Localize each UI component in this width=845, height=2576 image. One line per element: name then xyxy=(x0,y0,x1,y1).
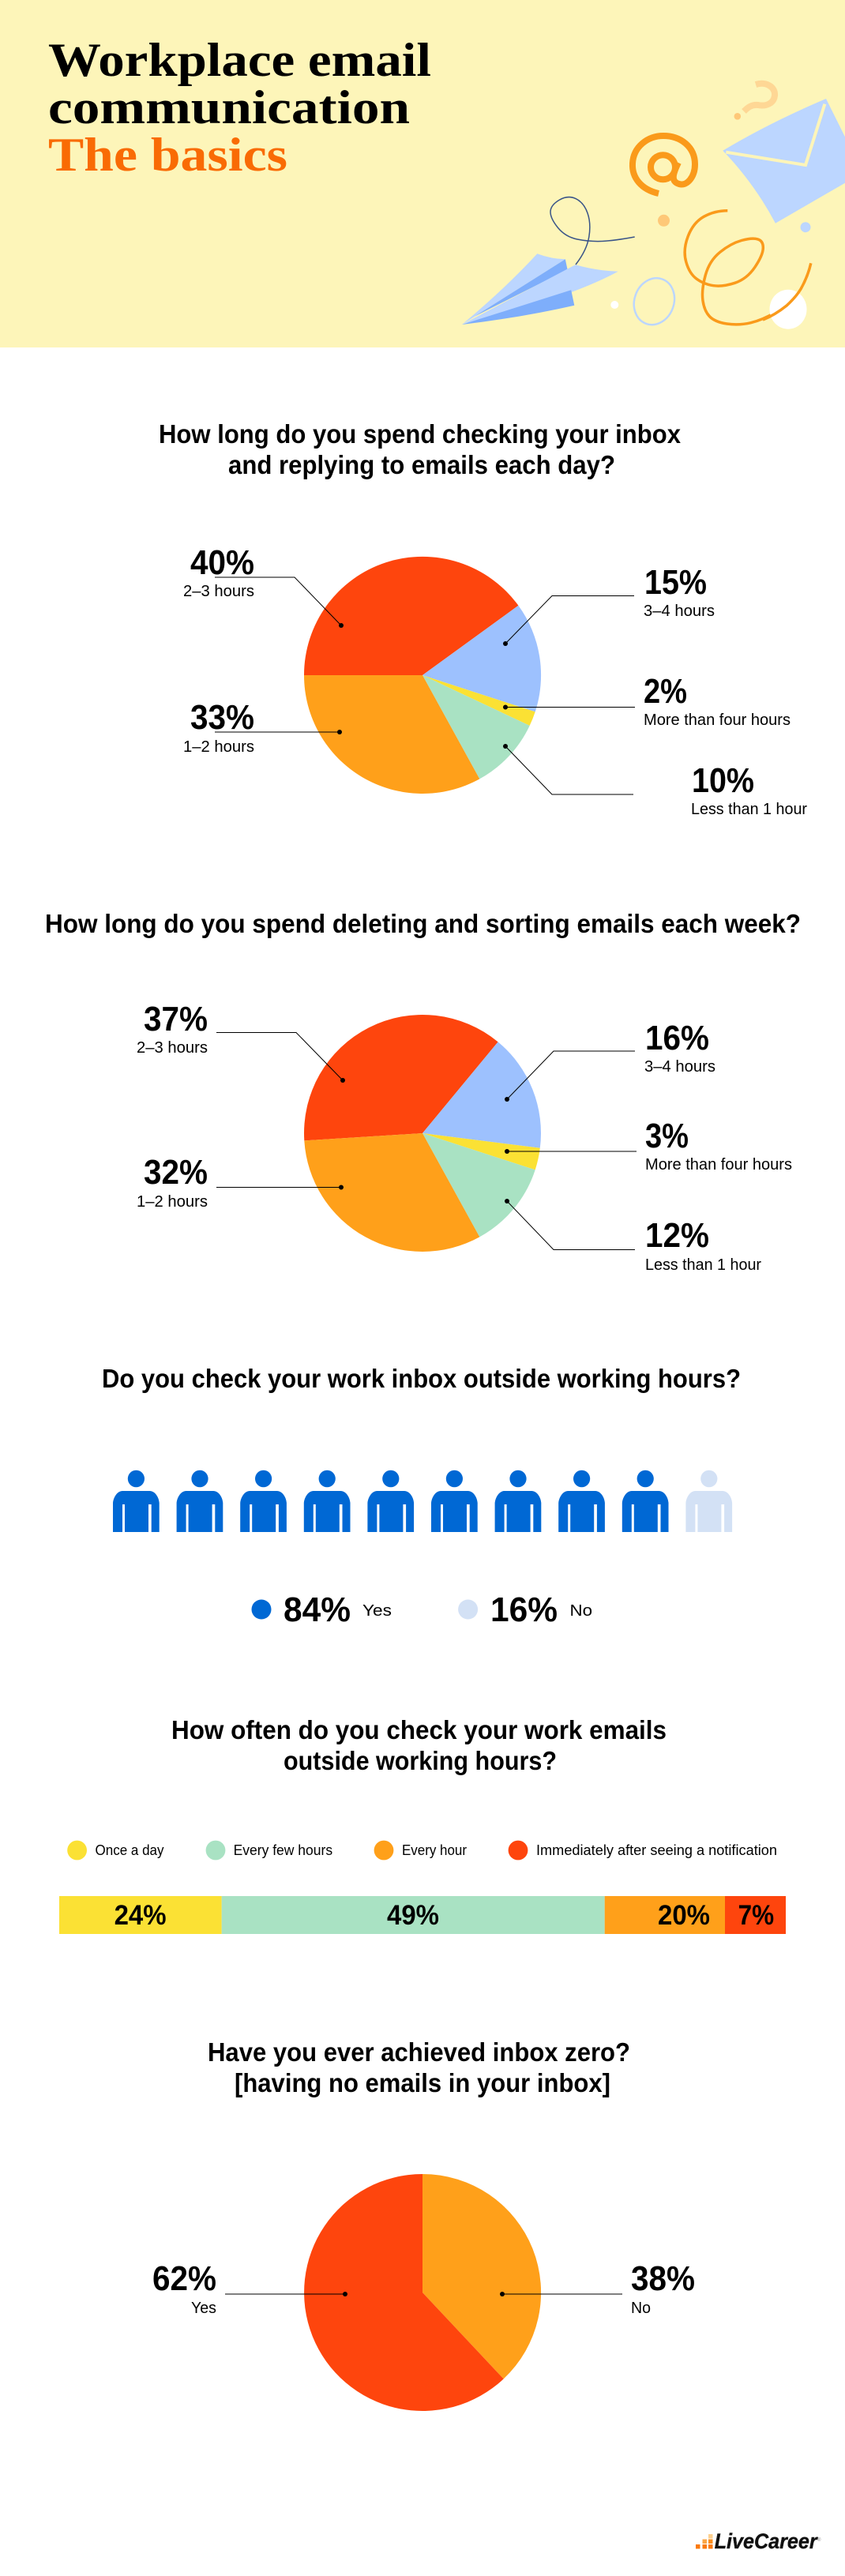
legend: no: 16% xyxy=(490,1590,558,1629)
legend: yes: 84% xyxy=(284,1590,351,1629)
legend item: immediately: Immediately after seeing a notification xyxy=(536,1842,777,1858)
bar segment: 24% xyxy=(59,1896,222,1934)
icon: person 6 xyxy=(431,1470,478,1532)
bar segment: 7% xyxy=(725,1896,786,1934)
heading: inbox time: and replying to emails each day? xyxy=(228,450,615,479)
callout: 38% xyxy=(500,2259,695,2317)
callout: 3%: 3% xyxy=(645,1117,689,1155)
callout: 15%: 3–4 hours xyxy=(644,602,715,620)
callout: 33%: 33% xyxy=(190,698,254,737)
stacked bar chart xyxy=(59,1896,786,1934)
callout: 15%: 15% xyxy=(644,563,707,602)
legend: yes: Yes xyxy=(362,1602,392,1620)
bar segment: 20% xyxy=(605,1896,725,1934)
callout: 10% xyxy=(503,744,807,818)
icon: blue ring xyxy=(628,272,681,330)
heading: inbox time: How long do you spend checking your inbox xyxy=(159,419,682,449)
pie chart: inbox zero xyxy=(304,2174,541,2411)
callout: 37%: 2–3 hours xyxy=(137,1038,208,1057)
title xyxy=(48,34,431,181)
bar segment: 24%: 24% xyxy=(115,1900,167,1931)
bar segment: 20%: 20% xyxy=(658,1900,710,1931)
icon: person 2 xyxy=(177,1470,223,1532)
callout: 62%: Yes xyxy=(191,2299,216,2317)
pie chart: time deleting and sorting xyxy=(304,1015,541,1252)
icon: person 4 xyxy=(304,1470,351,1532)
callout: 32%: 32% xyxy=(144,1153,208,1192)
callout: 33%: 1–2 hours xyxy=(183,738,254,756)
icon: white blob xyxy=(769,290,807,329)
heading: frequency: outside working hours? xyxy=(284,1746,557,1775)
icon: person 10 xyxy=(685,1470,732,1532)
legend: yes xyxy=(251,1590,392,1629)
heading: check inbox outside hours: Do you check your work inbox outside working hours? xyxy=(102,1364,741,1393)
icon: person 8 xyxy=(558,1470,605,1532)
title: communication xyxy=(48,81,410,133)
icon: question mark xyxy=(734,84,775,120)
callout: 12%: 12% xyxy=(645,1216,709,1255)
callout: 62%: 62% xyxy=(152,2259,216,2298)
icon: paper plane xyxy=(462,253,618,325)
icon: orange squiggle end xyxy=(763,263,811,320)
logo: LiveCareer: ® xyxy=(817,2537,821,2543)
icon: at sign xyxy=(633,136,695,193)
legend item: every few hours: Every few hours xyxy=(234,1842,332,1858)
legend: no xyxy=(458,1590,592,1629)
legend: frequency xyxy=(67,1841,777,1860)
chart: people pictogram xyxy=(113,1470,732,1532)
icon: logo squares xyxy=(696,2534,712,2549)
callout: 40%: 40% xyxy=(190,543,254,582)
pie chart: time checking inbox xyxy=(304,557,541,794)
icon: envelope xyxy=(723,99,845,223)
callout: 37%: 37% xyxy=(144,1000,208,1038)
legend item: every few hours xyxy=(206,1841,332,1860)
icon: plane trail xyxy=(550,197,635,265)
callout: 3%: More than four hours xyxy=(645,1155,792,1173)
callout: 32%: 1–2 hours xyxy=(137,1192,208,1211)
callout: 16%: 16% xyxy=(645,1019,709,1057)
callout: 10%: Less than 1 hour xyxy=(691,800,807,818)
callout: 40%: 2–3 hours xyxy=(183,582,254,600)
callout: 2%: 2% xyxy=(644,672,687,711)
title: The basics xyxy=(48,129,287,181)
icon: person 7 xyxy=(495,1470,541,1532)
legend: no: No xyxy=(570,1602,592,1620)
heading: inbox zero: [having no emails in your inbox] xyxy=(235,2068,610,2097)
callout: 38%: 38% xyxy=(631,2259,695,2298)
callout: 15% xyxy=(503,563,715,646)
callout: 16%: 3–4 hours xyxy=(644,1057,715,1076)
legend item: once a day: Once a day xyxy=(95,1842,164,1858)
icon: decorative dots xyxy=(610,215,810,309)
callout: 2% xyxy=(503,672,791,729)
icon: person 1 xyxy=(113,1470,160,1532)
bar segment: 49%: 49% xyxy=(387,1900,439,1931)
callout: 40% xyxy=(183,543,344,628)
icon: person 5 xyxy=(367,1470,414,1532)
bar segment: 7%: 7% xyxy=(738,1900,774,1931)
callout: 32% xyxy=(137,1153,344,1211)
title: Workplace email xyxy=(48,34,431,86)
callout: 10%: 10% xyxy=(692,761,754,800)
heading: inbox zero xyxy=(208,2037,630,2097)
legend item: once a day xyxy=(67,1841,164,1860)
callout: 2%: More than four hours xyxy=(644,711,791,729)
heading: deleting and sorting: How long do you spend deleting and sorting emails each week? xyxy=(45,909,801,938)
logo: LiveCareer: LiveCareer xyxy=(715,2529,818,2553)
callout: 62% xyxy=(152,2259,347,2317)
panel: header banner xyxy=(0,0,845,347)
heading: inbox zero: Have you ever achieved inbox zero? xyxy=(208,2037,630,2067)
callout: 37% xyxy=(137,1000,345,1083)
icon: person 3 xyxy=(240,1470,287,1532)
legend item: every hour: Every hour xyxy=(402,1842,467,1858)
heading: frequency xyxy=(171,1715,667,1775)
callout: 12%: Less than 1 hour xyxy=(645,1256,761,1274)
callout: 38%: No xyxy=(631,2299,651,2317)
icon: person 9 xyxy=(622,1470,668,1532)
callout: 12% xyxy=(505,1199,761,1274)
legend item: every hour xyxy=(374,1841,467,1860)
bar segment: 49% xyxy=(222,1896,605,1934)
callout: 16% xyxy=(505,1019,715,1102)
callout: 33% xyxy=(183,698,342,756)
heading: inbox time xyxy=(159,419,682,479)
heading: frequency: How often do you check your work emails xyxy=(171,1715,667,1744)
icon: orange squiggle xyxy=(685,211,775,325)
callout: 3% xyxy=(505,1117,792,1173)
